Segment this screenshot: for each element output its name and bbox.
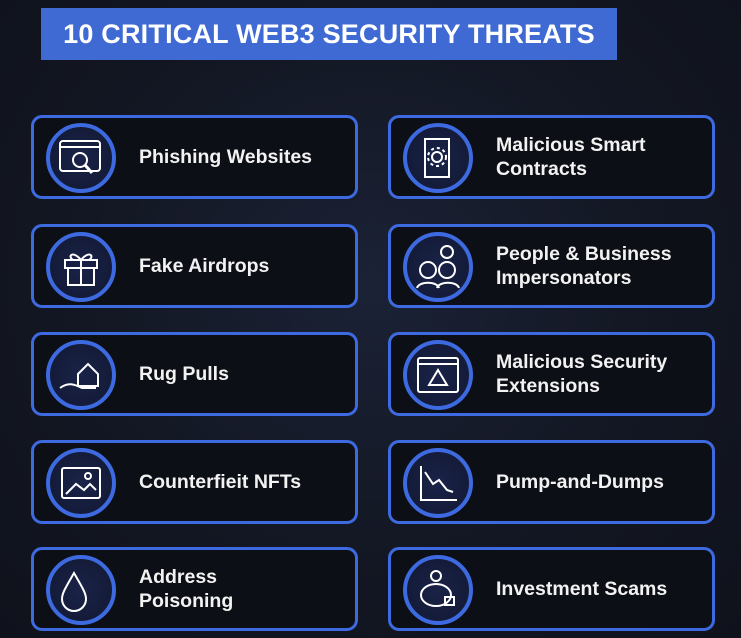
card: security extensions: Malicious Security <box>496 351 667 373</box>
icon: falling chart <box>403 448 473 518</box>
card: counterfeit NFTs: Counterfieit NFTs <box>139 471 301 493</box>
icon: browser warning <box>403 340 473 410</box>
card: address poisoning: Address <box>139 566 217 588</box>
icon: image frame <box>46 448 116 518</box>
card: impersonators: People & Business <box>496 243 672 265</box>
card: investment scams <box>388 547 715 631</box>
card: security extensions <box>388 332 715 416</box>
card: security extensions: Extensions <box>496 375 600 397</box>
icon: hand house <box>46 340 116 410</box>
icon: two faces <box>403 232 473 302</box>
icon: piggy bank <box>403 555 473 625</box>
card: fake airdrops <box>31 224 358 308</box>
icon: contract gear <box>403 123 473 193</box>
card: pump and dumps <box>388 440 715 524</box>
card: counterfeit NFTs <box>31 440 358 524</box>
icon: browser magnifier <box>46 123 116 193</box>
card: fake airdrops: Fake Airdrops <box>139 255 269 277</box>
card: impersonators <box>388 224 715 308</box>
card: investment scams: Investment Scams <box>496 578 667 600</box>
card: pump and dumps: Pump-and-Dumps <box>496 471 664 493</box>
card: malicious smart contracts: Contracts <box>496 158 587 180</box>
card: malicious smart contracts: Malicious Smart <box>496 134 646 156</box>
card: phishing websites: Phishing Websites <box>139 146 312 168</box>
card: rug pulls <box>31 332 358 416</box>
card: malicious smart contracts <box>388 115 715 199</box>
card: address poisoning <box>31 547 358 631</box>
icon: gift <box>46 232 116 302</box>
icon: drop <box>46 555 116 625</box>
card: rug pulls: Rug Pulls <box>139 363 229 385</box>
card: address poisoning: Poisoning <box>139 590 233 612</box>
card: impersonators: Impersonators <box>496 267 631 289</box>
title: 10 CRITICAL WEB3 SECURITY THREATS <box>63 19 595 49</box>
title <box>41 8 617 60</box>
card: phishing websites <box>31 115 358 199</box>
